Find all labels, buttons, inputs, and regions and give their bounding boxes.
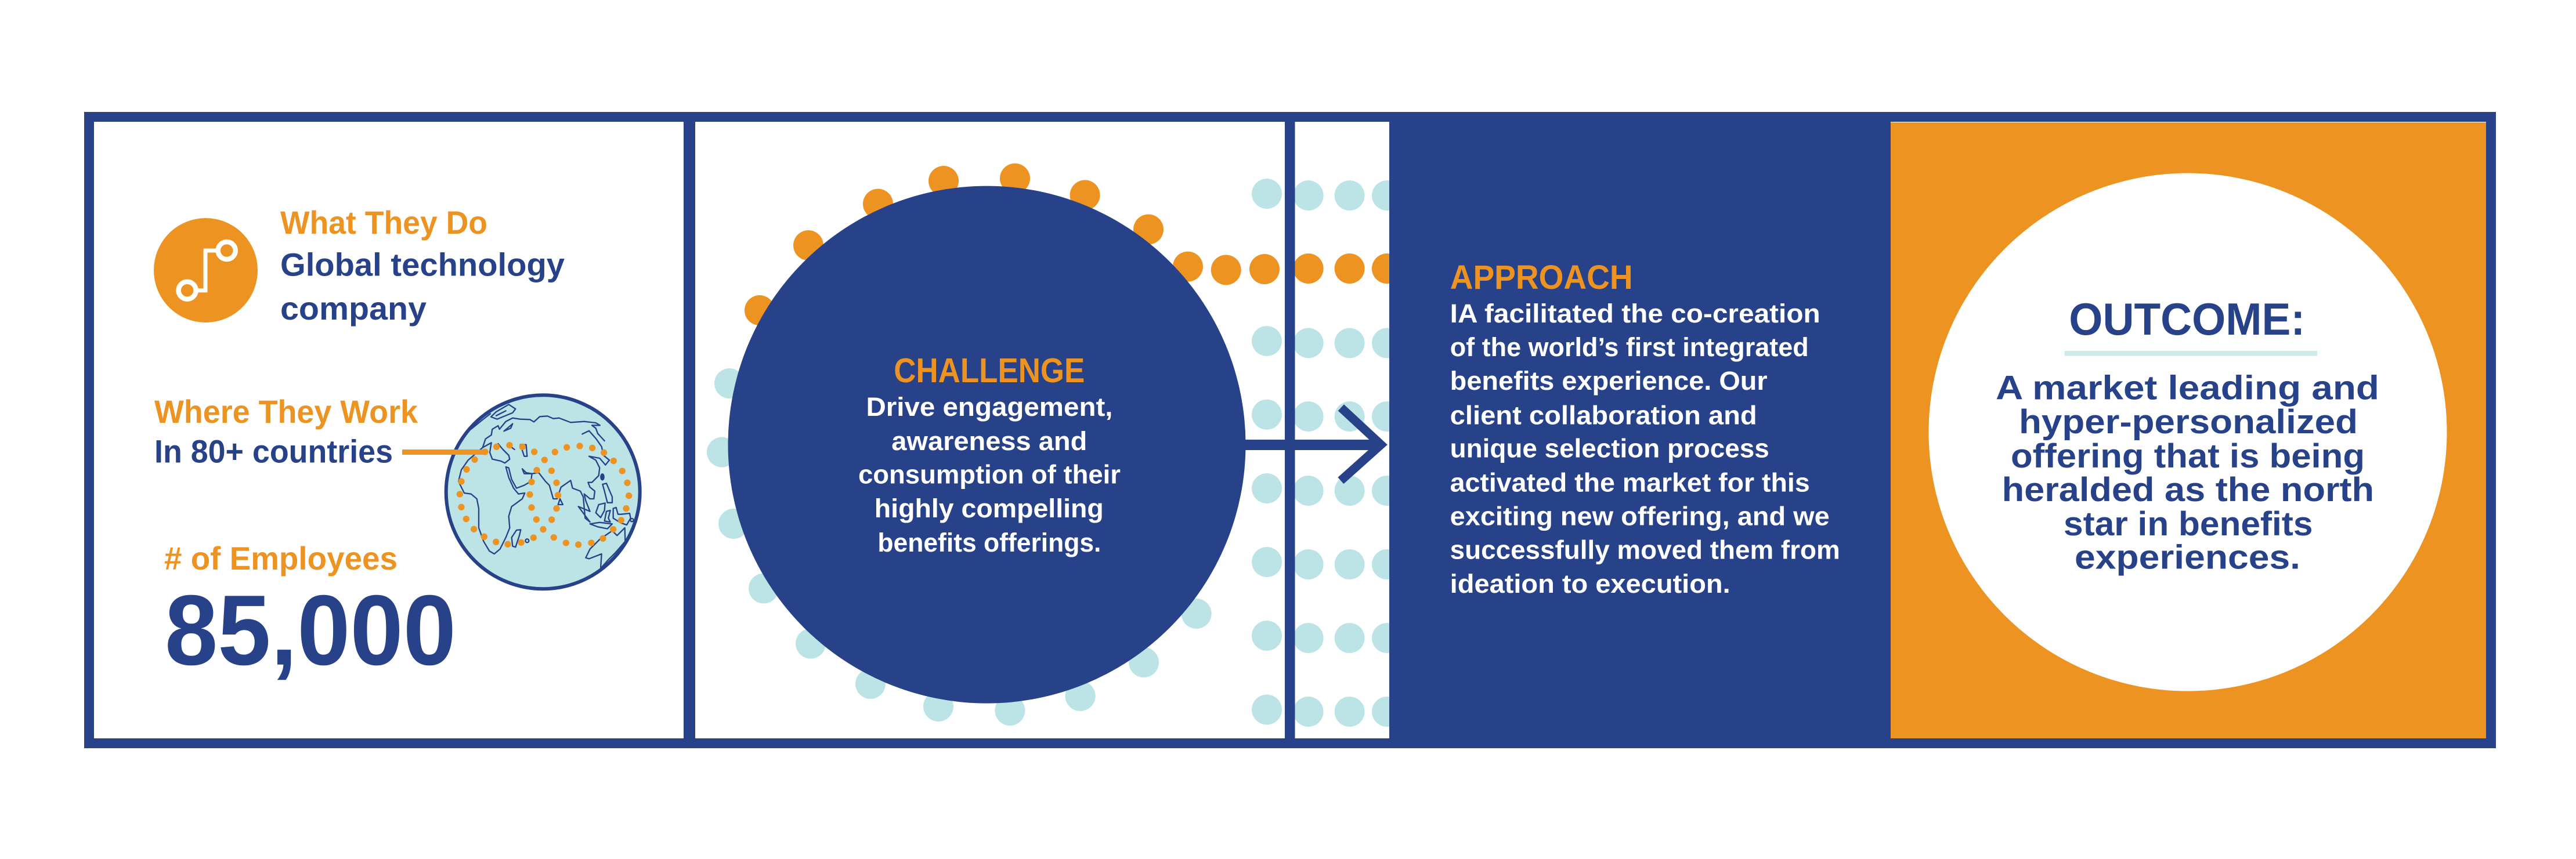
underline below heading (2065, 351, 2317, 356)
text: challenge body: consumption of their (858, 460, 1121, 490)
panel: company profile (84, 112, 695, 748)
text: approach body: exciting new offering, and we (1450, 502, 1830, 531)
text: approach body: unique selection process (1450, 434, 1769, 463)
text: approach body (1450, 299, 1840, 599)
text: outcome body: heralded as the north (2002, 471, 2374, 509)
text: approach body: activated the market for this (1450, 467, 1810, 498)
text: challenge body: benefits offerings. (877, 528, 1101, 557)
icon: connected nodes (154, 218, 258, 322)
heading: outcome: OUTCOME: (2069, 293, 2305, 345)
text: where they work: In 80+ countries (154, 433, 393, 470)
text: approach body: ideation to execution. (1450, 569, 1730, 599)
text: where they work (154, 393, 418, 470)
text: challenge body (858, 392, 1121, 557)
heading: approach: APPROACH (1450, 259, 1633, 296)
text: number of employees: # of Employees (164, 540, 398, 577)
text: where they work: Where They Work (154, 393, 418, 430)
text: what they do (280, 204, 565, 327)
heading: challenge: CHALLENGE (894, 351, 1085, 390)
text: outcome body: experiences. (2075, 539, 2300, 577)
text: what they do: What They Do (280, 204, 487, 241)
outer frame and dividers (84, 112, 2496, 748)
text: outcome body: star in benefits (2064, 505, 2313, 543)
text: outcome body: offering that is being (2011, 437, 2365, 475)
text: approach body: successfully moved them from (1450, 535, 1840, 565)
text: approach body: client collaboration and (1450, 400, 1757, 430)
text: approach body: benefits experience. Our (1450, 366, 1768, 396)
text: what they do: company (280, 290, 427, 327)
decorative dot field (707, 164, 1402, 727)
text: what they do: Global technology (280, 246, 565, 283)
text: approach body: IA facilitated the co-creation (1450, 299, 1820, 328)
panel: challenge (707, 164, 1402, 727)
text: outcome body (1996, 369, 2379, 577)
text: number of employees: 85,000 (165, 575, 456, 686)
challenge circle (728, 186, 1245, 704)
icon: globe with dotted route (402, 395, 640, 589)
panel: outcome (1891, 122, 2486, 739)
text: challenge body: highly compelling (875, 494, 1104, 523)
text: outcome body: hyper-personalized (2019, 403, 2358, 441)
text: challenge body: awareness and (891, 426, 1087, 456)
outcome circle (1929, 173, 2447, 691)
text: approach body: of the world’s first integrated (1450, 332, 1809, 362)
text: challenge body: Drive engagement, (866, 392, 1113, 422)
panel: approach (1389, 112, 1891, 748)
text: outcome body: A market leading and (1996, 369, 2379, 407)
arrow: challenge to approach (1242, 408, 1381, 481)
